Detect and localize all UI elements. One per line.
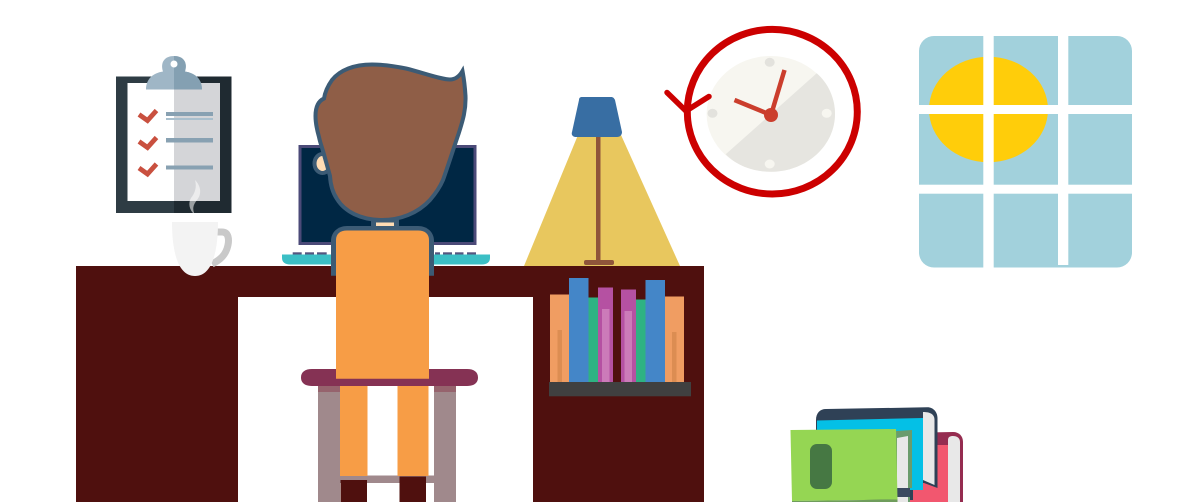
legs and feet <box>340 386 428 502</box>
torso outline <box>331 226 434 276</box>
navy and cyan book <box>816 407 938 500</box>
clock with arrow ring <box>667 29 857 194</box>
person at desk <box>314 64 466 379</box>
clock hands <box>734 70 784 122</box>
ring arrow <box>667 29 857 194</box>
head and hair <box>316 64 466 220</box>
torso <box>336 230 429 379</box>
desk lamp <box>524 97 680 266</box>
bookshelf with books <box>549 278 691 396</box>
keyboard <box>282 252 490 264</box>
clock face <box>707 56 835 172</box>
red book <box>900 432 963 502</box>
hour markers <box>708 58 832 168</box>
stack of books <box>790 407 963 502</box>
coffee mug with steam <box>172 180 228 276</box>
neck <box>371 216 399 230</box>
green book <box>790 429 912 502</box>
clipboard <box>116 56 232 213</box>
ear <box>314 154 330 173</box>
computer monitor <box>300 146 475 244</box>
desk <box>76 266 704 502</box>
stool <box>301 369 478 502</box>
window with sun <box>919 36 1132 268</box>
